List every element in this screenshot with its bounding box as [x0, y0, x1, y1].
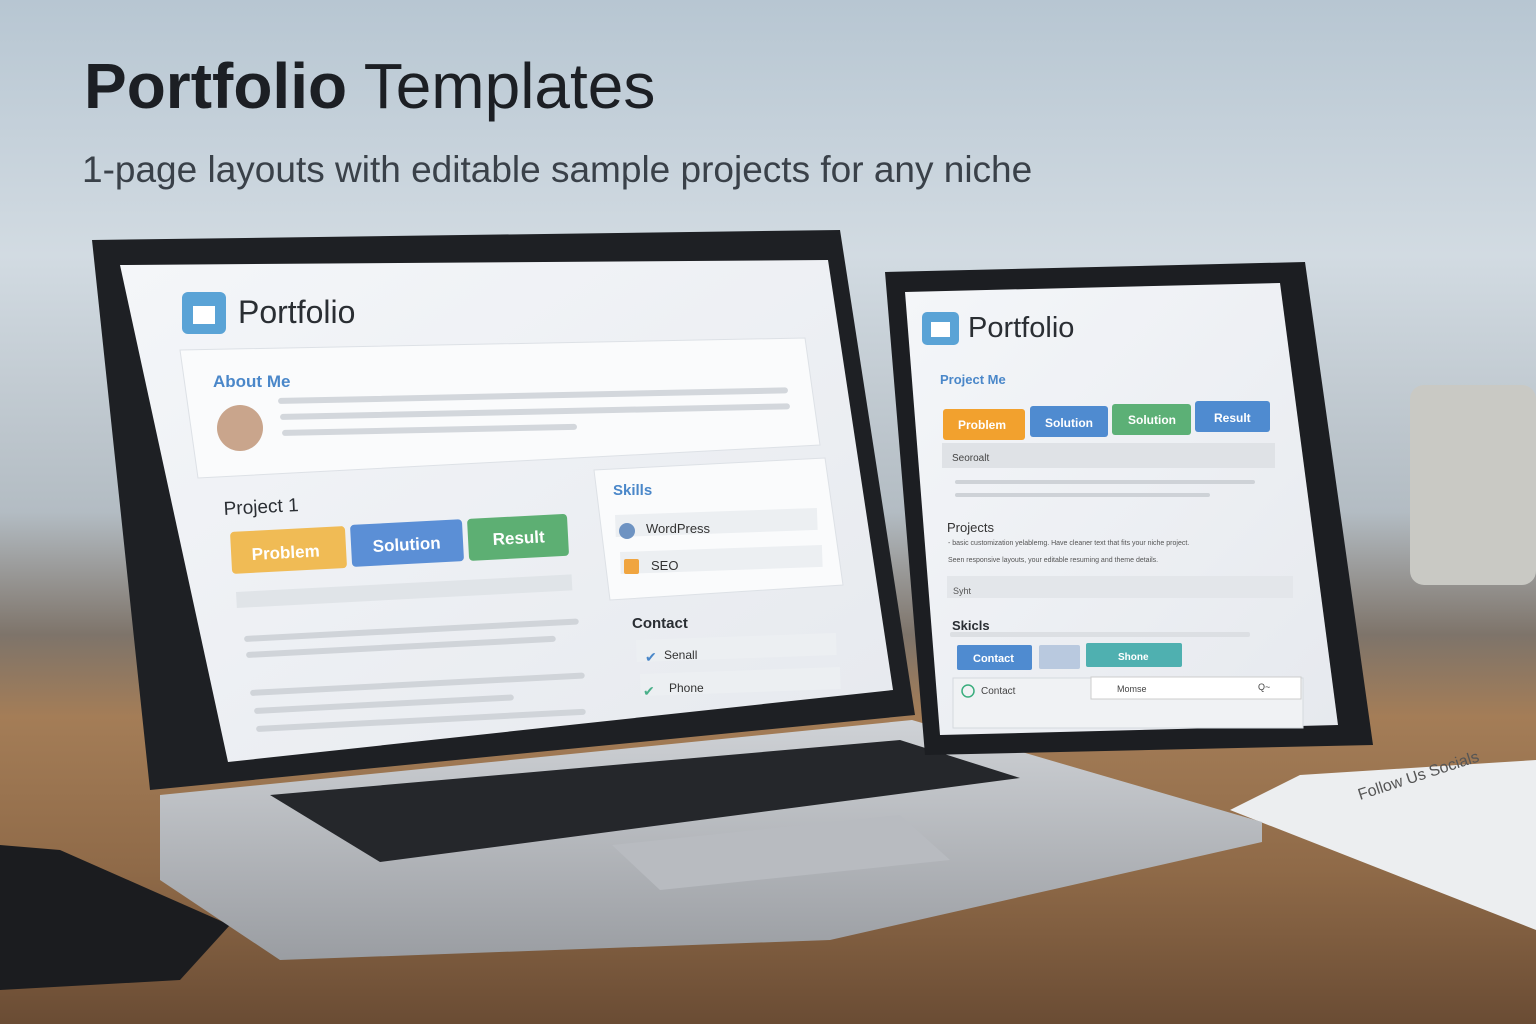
subtitle: 1-page layouts with editable sample projects for any niche [82, 149, 1032, 190]
tablet skills/contact: Momse [1117, 684, 1147, 694]
tablet project card: Result [1214, 411, 1251, 425]
tablet skills/contact: Q~ [1258, 682, 1270, 692]
tablet skills/contact: Shone [1118, 652, 1149, 663]
papers: Follow Us Socials [1356, 749, 1481, 804]
project 1 card: Project 1 [223, 495, 299, 520]
tablet project card: Problem [958, 418, 1006, 432]
contact panel: Phone [669, 681, 704, 695]
contact panel: Senall [664, 648, 697, 662]
contact panel: ✔ [645, 649, 657, 665]
pot on desk [1410, 385, 1536, 585]
skills panel: SEO [651, 558, 678, 573]
laptop screen content: About Me [213, 372, 290, 391]
phone [0, 845, 230, 990]
tablet project card: Seen responsive layouts, your editable resuming and theme details. [948, 557, 1158, 564]
laptop screen content: Portfolio [238, 294, 355, 330]
project 1 card [223, 495, 586, 732]
laptop screen content [180, 292, 843, 732]
contact panel [632, 615, 841, 699]
project 1 card: Result [492, 527, 545, 549]
icon: bag [182, 292, 226, 334]
tablet project card: - basic customization yelablemg. Have cleaner text that fits your niche project. [948, 540, 1189, 547]
tablet skills/contact: Skicls [952, 618, 990, 633]
skills panel: WordPress [646, 521, 711, 536]
title: Portfolio Templates [84, 50, 655, 122]
project 1 card: Problem [251, 541, 320, 564]
contact panel: Contact [632, 615, 688, 632]
papers [1230, 749, 1536, 930]
tablet header [922, 312, 1074, 345]
skills panel [594, 458, 843, 600]
laptop base [160, 720, 1262, 960]
tablet skills/contact [950, 618, 1303, 728]
tablet skills/contact: Contact [981, 686, 1016, 697]
about me card [180, 338, 820, 478]
tablet project card: Solution [1128, 413, 1176, 427]
tablet skills/contact: Contact [973, 653, 1014, 665]
tablet project card: Syht [953, 586, 972, 596]
tablet [885, 262, 1373, 755]
laptop [92, 230, 1262, 960]
tablet project card [940, 372, 1293, 598]
skills panel: Skills [613, 482, 652, 499]
tablet project card: Projects [947, 520, 994, 535]
contact panel: ✔ [643, 683, 655, 699]
tablet project card: Seoroalt [952, 453, 989, 464]
laptop screen bezel [92, 230, 915, 790]
tablet project card: Solution [1045, 416, 1093, 430]
tablet header: Portfolio [968, 312, 1074, 344]
tablet project card: Project Me [940, 372, 1006, 387]
project 1 card: Solution [372, 533, 441, 556]
